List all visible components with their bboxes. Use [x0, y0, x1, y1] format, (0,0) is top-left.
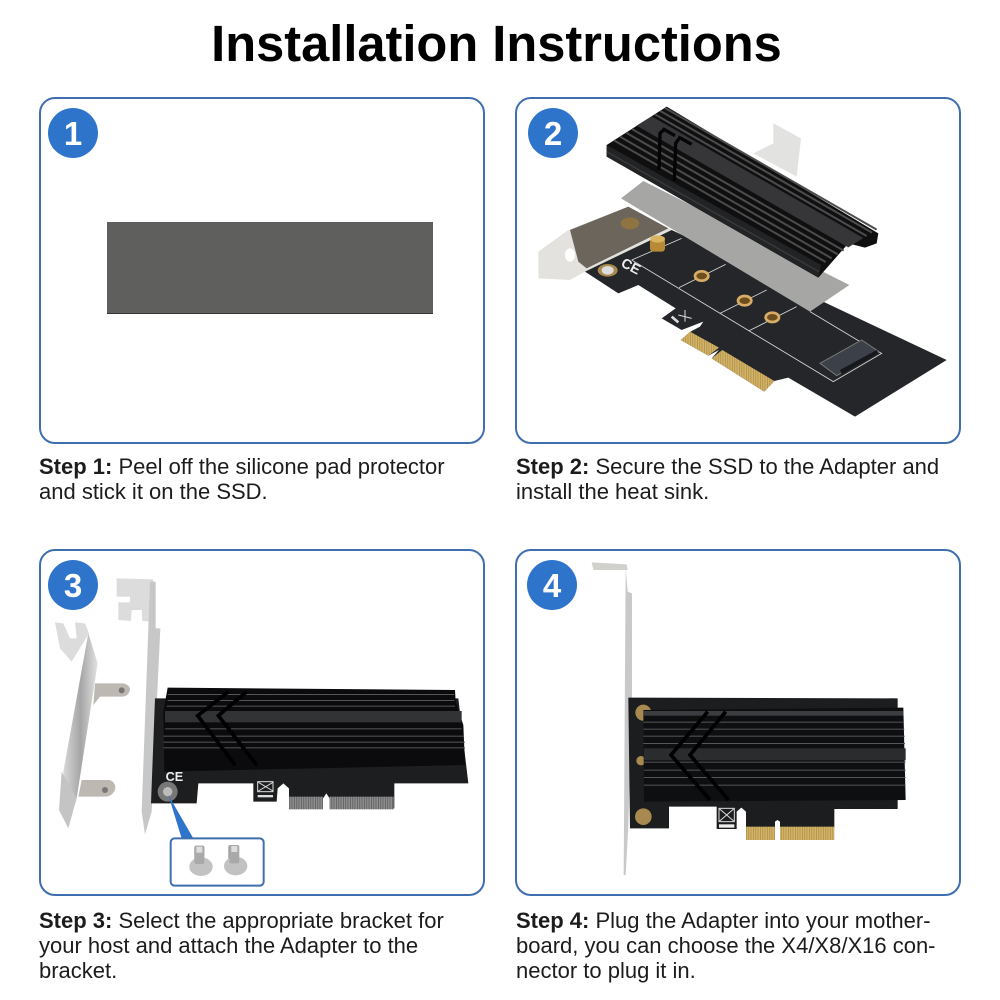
caption: step 3: Step 3: Select the appropriate bracket for — [39, 908, 444, 933]
illustration: adapter and brackets — [55, 578, 468, 886]
recycling mark — [672, 310, 692, 322]
circuit board — [151, 698, 468, 808]
badge: 4 — [527, 560, 577, 610]
screw hole — [158, 782, 178, 802]
screw — [224, 845, 247, 875]
recycle mark — [719, 808, 734, 828]
silicone thermal pad — [107, 222, 433, 314]
mounting holes — [695, 271, 779, 322]
caption: step 2: install the heat sink. — [516, 479, 709, 504]
chevrons — [198, 692, 257, 765]
heat sink fins — [163, 694, 465, 748]
full height bracket — [117, 578, 160, 834]
near bracket — [538, 207, 672, 280]
screw — [189, 846, 213, 876]
board traces — [632, 238, 882, 382]
mounting screws — [635, 705, 652, 825]
recycle mark — [258, 782, 273, 797]
heat sink — [163, 688, 465, 772]
illustration: exploded adapter with heat sink — [538, 107, 947, 417]
standoff — [650, 235, 665, 252]
panel: step 3 — [40, 550, 484, 895]
circuit board — [628, 698, 898, 829]
central flat band — [637, 116, 863, 247]
contact fingers — [289, 797, 323, 809]
chevrons — [659, 129, 692, 181]
panel: step 4 — [516, 550, 960, 895]
badge: 1 — [48, 108, 98, 158]
heat sink fins — [643, 711, 906, 786]
low profile bracket — [55, 622, 130, 828]
caption: step 1: and stick it on the SSD. — [39, 479, 268, 504]
callout pointer — [168, 795, 193, 838]
panel: step 1 — [40, 98, 484, 443]
gray silicone pad — [621, 181, 849, 312]
badge: 1: 1 — [64, 115, 82, 152]
badge: 2 — [528, 108, 578, 158]
screws inset — [171, 838, 264, 886]
caption: step 2: Step 2: Secure the SSD to the Adapter and — [516, 454, 939, 479]
heat sink — [643, 708, 906, 802]
caption: step 4: Step 4: Plug the Adapter into your mother- — [516, 908, 931, 933]
caption: step 3: your host and attach the Adapter to the — [39, 933, 418, 958]
badge: 3: 3 — [64, 567, 82, 604]
badge: 2: 2 — [544, 115, 562, 152]
title: Installation Instructions — [211, 15, 782, 72]
screw — [598, 264, 618, 277]
heat sink — [607, 107, 878, 278]
gold finger contacts — [681, 332, 719, 356]
illustration: assembled adapter — [592, 562, 906, 875]
caption: step 1: Step 1: Peel off the silicone pad protector — [39, 454, 445, 479]
circuit board — [585, 230, 947, 417]
m.2 connector — [820, 340, 879, 376]
badge: 4: 4 — [543, 567, 562, 604]
bracket — [592, 562, 632, 875]
CE mark: CE — [619, 254, 643, 278]
badge: 3 — [48, 560, 98, 610]
caption: step 4: nector to plug it in. — [516, 958, 696, 983]
caption: step 3: bracket. — [39, 958, 117, 983]
panel: step 2 — [516, 98, 960, 443]
chevrons — [671, 712, 728, 800]
caption: step 4: board, you can choose the X4/X8/X16 con- — [516, 933, 936, 958]
far bracket — [753, 123, 801, 177]
CE mark: CE — [166, 770, 183, 784]
gold contacts — [746, 827, 775, 840]
heat sink fins — [614, 108, 877, 262]
